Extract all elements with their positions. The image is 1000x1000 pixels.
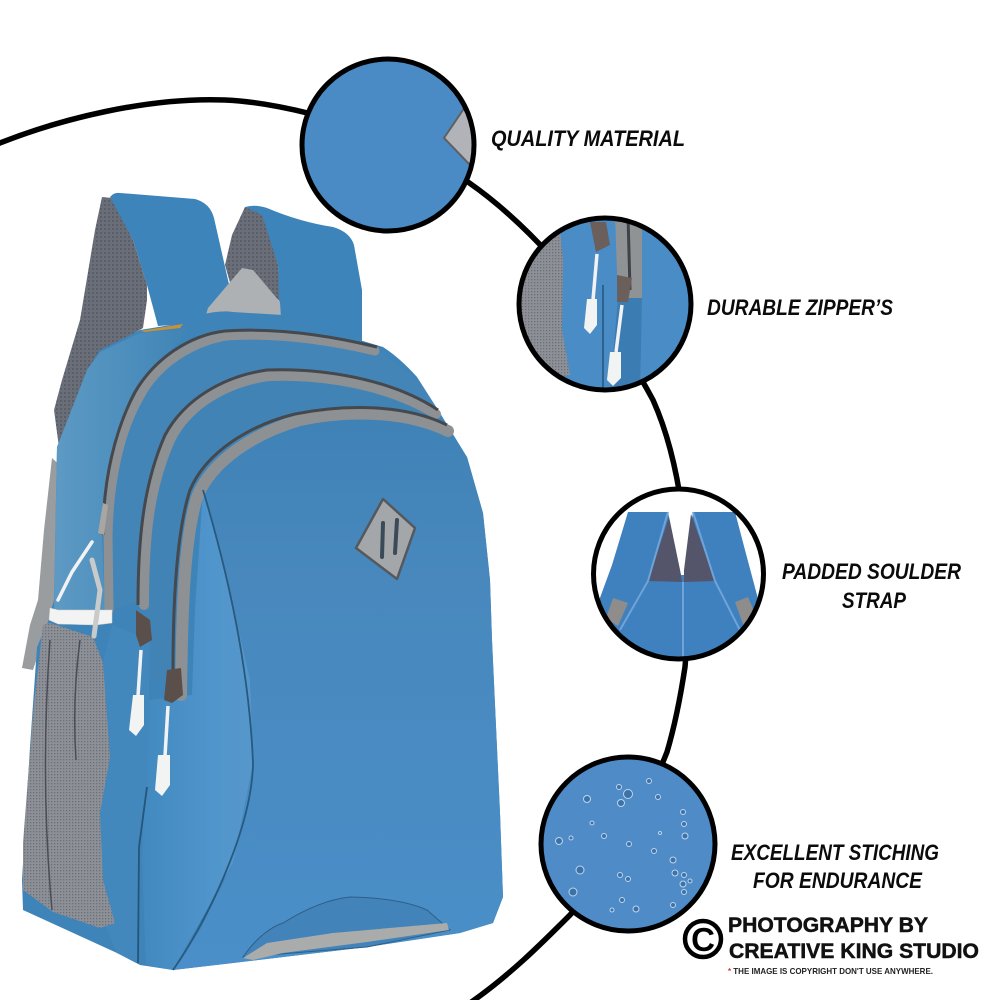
label: quality material: QUALITY MATERIAL	[491, 126, 685, 151]
front panel seam	[173, 490, 253, 970]
detail circle: water droplets	[541, 757, 715, 931]
copyright icon	[685, 921, 721, 958]
reflective strip	[243, 923, 449, 960]
side zipper pulls	[58, 503, 108, 636]
seam line	[602, 285, 604, 392]
reflective diamond patch	[356, 499, 415, 579]
front panel	[173, 412, 503, 970]
backpack	[22, 193, 503, 970]
label: excellent stitching: EXCELLENT STICHING	[731, 840, 939, 865]
zipper pull three	[155, 668, 183, 796]
strap seams	[620, 512, 745, 660]
middle pocket panel	[147, 378, 445, 680]
zipper pull two	[129, 610, 152, 736]
orange accent	[140, 324, 183, 332]
zipper tape right	[615, 221, 642, 298]
detail circle: quality material	[302, 59, 480, 231]
right strap underside	[225, 207, 280, 300]
straps and body	[600, 512, 758, 656]
zipper pull left	[590, 222, 610, 252]
mesh area	[522, 234, 570, 376]
label: excellent stitching	[731, 840, 939, 893]
body silhouette	[22, 311, 503, 970]
side seam	[138, 787, 147, 963]
front left band	[142, 490, 253, 970]
right strap	[245, 206, 362, 345]
photography credit: PHOTOGRAPHY BY	[728, 914, 928, 937]
left strap underside	[54, 197, 147, 455]
photography credit: * THE IMAGE IS COPYRIGHT DON'T USE ANYWHERE.	[728, 966, 933, 976]
lower side panel	[100, 625, 150, 963]
zipper pull right	[617, 275, 632, 302]
photography credit	[728, 914, 979, 976]
bottom curved patch	[243, 897, 450, 957]
grab handle	[205, 268, 281, 318]
reflective tabs	[606, 598, 628, 626]
detail circle: shoulder strap	[590, 489, 765, 670]
side webbing	[22, 458, 63, 670]
label: padded shoulder strap	[782, 559, 961, 613]
label: padded shoulder strap: STRAP	[842, 588, 906, 613]
left side panel	[54, 328, 190, 612]
copyright icon: C	[691, 921, 715, 958]
pocket fold	[45, 640, 80, 910]
white webbing loop	[49, 608, 112, 625]
droplets	[556, 778, 692, 912]
zipper teeth	[103, 330, 447, 670]
detail circle: zippers	[515, 215, 695, 395]
patch corner	[442, 108, 472, 166]
label: durable zippers: DURABLE ZIPPER’S	[707, 295, 893, 320]
mesh pocket	[23, 623, 115, 928]
left strap	[110, 193, 238, 326]
top panel	[112, 333, 440, 610]
label: excellent stitching: FOR ENDURANCE	[753, 868, 923, 893]
connecting arc	[0, 100, 688, 1000]
padding	[648, 517, 682, 582]
photography credit: CREATIVE KING STUDIO	[729, 940, 979, 963]
zipper tapes	[108, 335, 448, 695]
label: padded shoulder strap: PADDED SOULDER	[782, 559, 961, 584]
